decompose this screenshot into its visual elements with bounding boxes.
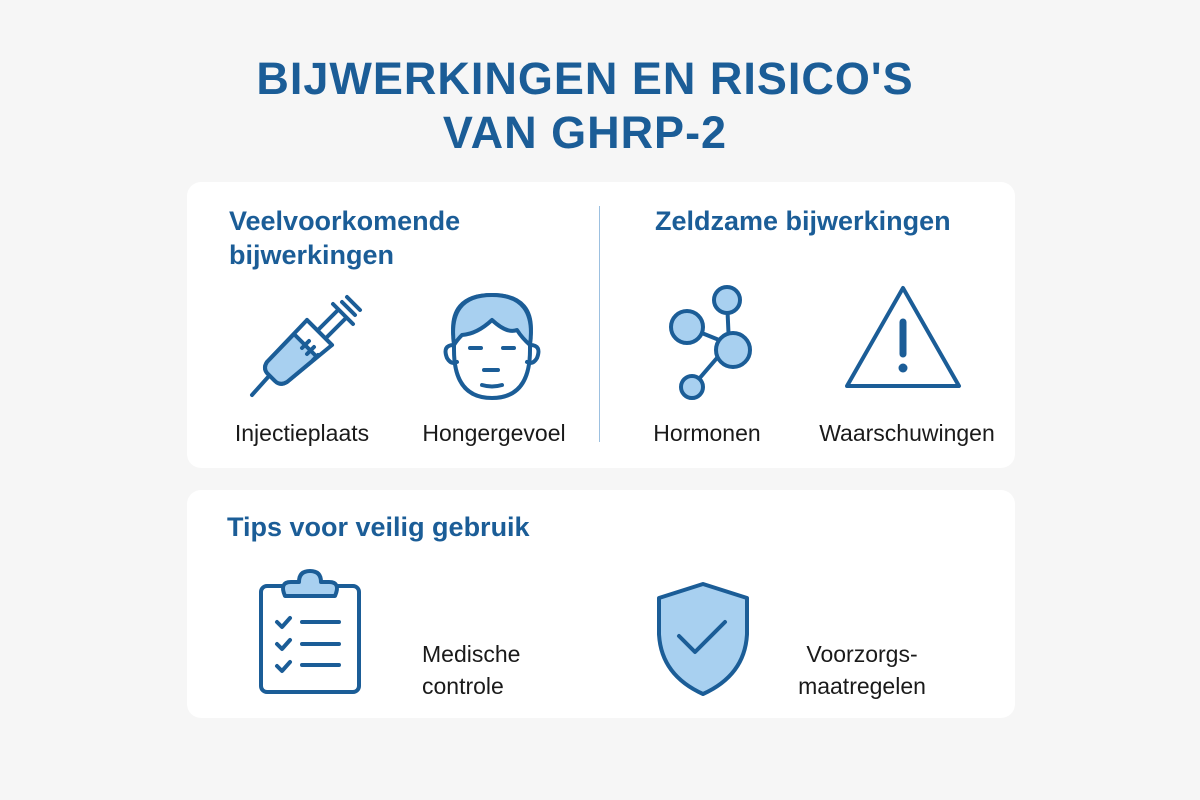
- divider: [599, 206, 600, 442]
- icon: face: [444, 293, 540, 400]
- label: Waarschuwingen: Waarschuwingen: [819, 420, 995, 446]
- heading: rare side effects: Zeldzame bijwerkingen: [655, 206, 951, 236]
- label: Medische controle: controle: [422, 673, 504, 699]
- icon: clipboard: [259, 569, 361, 694]
- title: [256, 53, 914, 158]
- title: BIJWERKINGEN EN RISICO'S: [256, 53, 914, 104]
- heading: common side effects: [229, 206, 460, 270]
- icon: shield: [657, 582, 749, 696]
- icon: warning: [845, 286, 962, 388]
- label: Medische controle: [422, 641, 520, 699]
- label: Hongergevoel: Hongergevoel: [422, 420, 566, 446]
- heading: tips: Tips voor veilig gebruik: [227, 512, 530, 542]
- panel: side effects: [187, 182, 1015, 468]
- label: Voorzorgsmaatregelen: Voorzorgs-: [806, 641, 918, 667]
- label: Injectieplaats: Injectieplaats: [235, 420, 369, 446]
- label: Hormonen: Hormonen: [653, 420, 761, 446]
- label: Voorzorgsmaatregelen: maatregelen: [798, 673, 926, 699]
- heading: common side effects: Veelvoorkomende: [229, 206, 460, 236]
- icon: molecule: [669, 285, 752, 400]
- title: VAN GHRP-2: [443, 107, 727, 158]
- panel: tips: [187, 490, 1015, 718]
- heading: common side effects: bijwerkingen: [229, 240, 394, 270]
- label: Medische controle: Medische: [422, 641, 520, 667]
- label: Voorzorgsmaatregelen: [798, 641, 926, 699]
- icon: syringe: [250, 294, 362, 398]
